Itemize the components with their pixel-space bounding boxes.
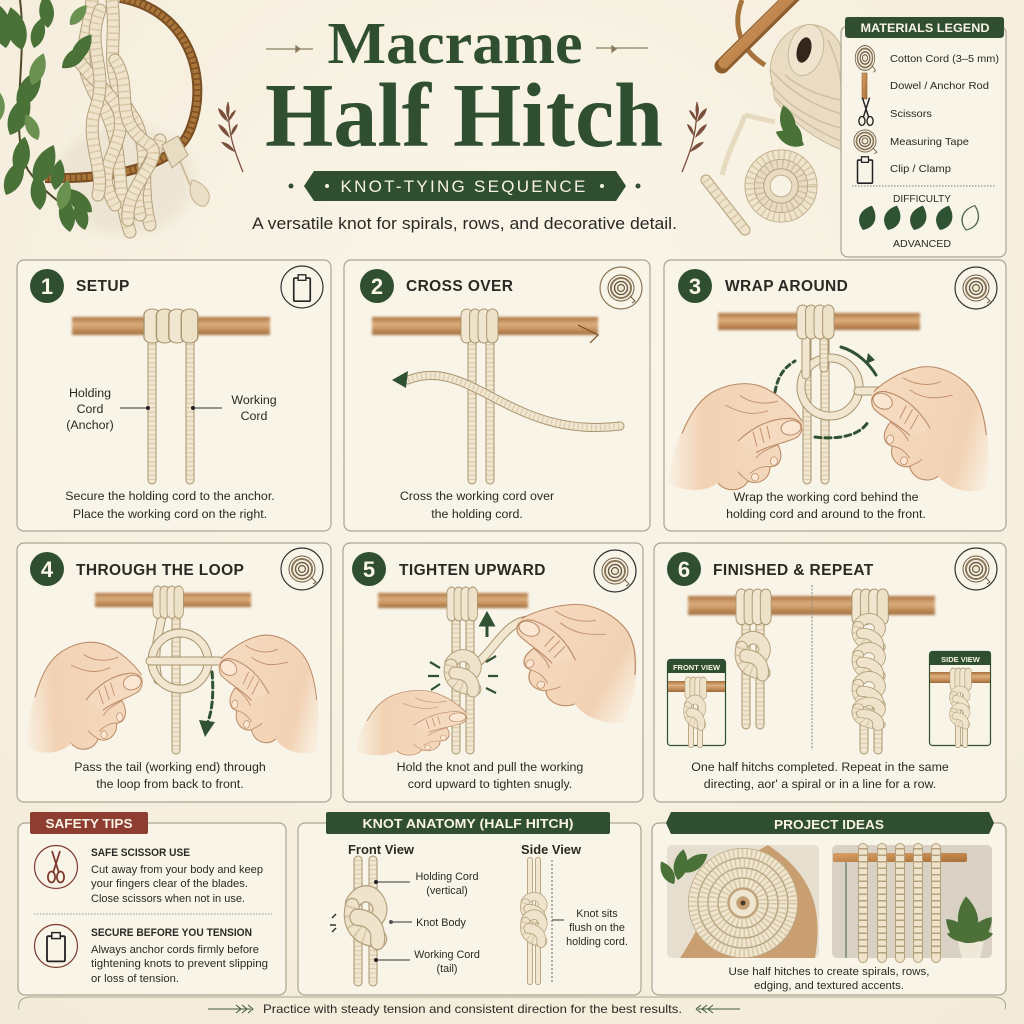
- label: working cord: [374, 949, 480, 975]
- legend label: scissors: Scissors: [890, 109, 932, 120]
- step number 1: 1: [41, 274, 53, 299]
- difficulty rating: ADVANCED: [893, 239, 951, 250]
- caption: the loop from back to front.: [96, 777, 244, 791]
- left hand: [668, 384, 803, 490]
- difficulty rating: [852, 186, 996, 250]
- legend: cotton cord: Cotton Cord (3–5 mm): [890, 54, 999, 65]
- caption: Place the working cord on the right.: [73, 507, 267, 521]
- anatomy heading: [326, 812, 610, 834]
- legend: cotton cord: [855, 46, 999, 72]
- icon: cord coil: [281, 548, 323, 590]
- label: working cord: [191, 393, 277, 423]
- step number 4: 4: [41, 557, 54, 582]
- step number 5: 5: [363, 557, 375, 582]
- icon: cord coil: [594, 550, 636, 592]
- project heading: [666, 812, 994, 834]
- decorative photo: macrame hoop and leaves: [0, 0, 209, 235]
- legend: scissors: [859, 98, 873, 126]
- label: holding cord: Cord: [77, 402, 104, 416]
- diagram: tail through loop with hands: [18, 586, 340, 758]
- icon: scissors: [34, 846, 78, 888]
- icon: left sprig: [218, 102, 243, 172]
- caption: [397, 760, 583, 791]
- anatomy heading: KNOT ANATOMY (HALF HITCH): [362, 816, 574, 831]
- panel: step 1 setup: [17, 260, 331, 531]
- caption: Use half hitches to create spirals, rows,: [728, 966, 930, 978]
- legend: measuring tape: Measuring Tape: [890, 137, 969, 148]
- panel: step 3 wrap around: [664, 260, 1014, 531]
- panel: knot anatomy: [298, 812, 641, 995]
- caption: [65, 489, 275, 521]
- step heading: WRAP AROUND: [725, 278, 848, 295]
- label: working cord: (tail): [436, 963, 458, 975]
- diagram: tightening knot with hands: [355, 586, 673, 755]
- legend header: MATERIALS LEGEND: [860, 21, 990, 35]
- caption: [74, 760, 266, 791]
- panel: project ideas: [652, 812, 1006, 995]
- panel: step 4 through the loop: [17, 543, 340, 802]
- legend header: [845, 17, 1004, 38]
- tip: secure before you tension: [91, 927, 268, 985]
- photo: macrame wall hanging: [832, 845, 997, 958]
- diagram: front knot: [330, 860, 380, 982]
- tip: safe scissor use: [91, 847, 263, 905]
- legend: clip: [858, 157, 951, 183]
- label: holding cord: (Anchor): [66, 418, 114, 432]
- photo: spiral coaster: [656, 845, 819, 958]
- panel: materials legend: [841, 17, 1006, 257]
- tip: safe scissor use: your fingers clear of the blades.: [91, 878, 248, 890]
- caption: One half hitchs completed. Repeat in the same: [691, 760, 949, 774]
- diagram: working cord crossing holding cord: [372, 309, 620, 480]
- label: holding cord: [66, 386, 150, 432]
- icon: clipboard: [34, 924, 78, 968]
- arrow: pull down: [199, 672, 215, 737]
- title flourishes: [266, 46, 648, 52]
- front view heading: Front View: [348, 842, 415, 857]
- diagram: anchor and cords: [72, 309, 270, 480]
- wrap direction arrows: [775, 347, 876, 438]
- footer bracket: [19, 997, 1006, 1009]
- tip: secure before you tension: SECURE BEFORE YOU TENSION: [91, 927, 252, 939]
- title: Half Hitch: Half Hitch: [265, 65, 663, 166]
- caption: [400, 489, 554, 521]
- icon: cord coil: [955, 548, 997, 590]
- tip: secure before you tension: or loss of tension.: [91, 973, 179, 985]
- step heading: SETUP: [76, 278, 130, 295]
- tip: safe scissor use: Cut away from your body and keep: [91, 864, 263, 876]
- difficulty rating: DIFFICULTY: [893, 194, 951, 205]
- icon: cord coil: [955, 267, 997, 309]
- caption: Cross the working cord over: [400, 489, 554, 503]
- step heading: THROUGH THE LOOP: [76, 562, 244, 579]
- caption: directing, aor' a spiral or in a line for a row.: [704, 777, 936, 791]
- label: knot sits flush: holding cord.: [566, 936, 628, 948]
- caption: [728, 966, 930, 992]
- caption: the holding cord.: [431, 507, 523, 521]
- caption: holding cord and around to the front.: [726, 507, 926, 521]
- arrow head: [392, 371, 408, 388]
- label: knot sits flush: Knot sits: [576, 908, 618, 920]
- tension ticks: [428, 656, 498, 693]
- step number 6: 6: [678, 557, 690, 582]
- inset: side view: [930, 651, 991, 746]
- safety heading: SAFETY TIPS: [46, 816, 133, 831]
- diagram: wrapping loop with hands: [668, 305, 1014, 496]
- inset: side view: SIDE VIEW: [941, 655, 981, 664]
- icon: cord coil: [600, 267, 642, 309]
- step number 5: [352, 552, 386, 586]
- step heading: TIGHTEN UPWARD: [399, 562, 546, 579]
- legend: dowel: [862, 73, 989, 99]
- right hand: [204, 622, 340, 758]
- step heading: CROSS OVER: [406, 278, 513, 295]
- caption: Secure the holding cord to the anchor.: [65, 489, 275, 503]
- tip: secure before you tension: tightening knots to prevent slipping: [91, 958, 268, 970]
- label: working cord: Working Cord: [414, 949, 480, 961]
- label: holding cord: Holding Cord: [415, 871, 479, 883]
- safety heading: [30, 812, 148, 834]
- caption: Pass the tail (working end) through: [74, 760, 266, 774]
- side view heading: Side View: [521, 842, 582, 857]
- label: knot body: Knot Body: [416, 917, 467, 929]
- tip: safe scissor use: Close scissors when not in use.: [91, 893, 245, 905]
- left hand: [18, 638, 148, 755]
- label: knot body: [389, 917, 467, 929]
- step heading: FINISHED & REPEAT: [713, 562, 874, 579]
- caption: Hold the knot and pull the working: [397, 760, 583, 774]
- step number 3: [678, 269, 712, 303]
- icon: clipboard: [281, 266, 323, 308]
- caption: [691, 760, 949, 791]
- step number 3: 3: [689, 274, 701, 299]
- panel: step 5 tighten upward: [343, 543, 673, 802]
- label: holding cord: Holding: [69, 386, 111, 400]
- step number 2: 2: [371, 274, 383, 299]
- legend: measuring tape: [854, 130, 969, 154]
- title: Macrame: Macrame: [328, 10, 582, 76]
- step number 6: [667, 552, 701, 586]
- tip: secure before you tension: Always anchor cords firmly before: [91, 944, 259, 956]
- step number 2: [360, 269, 394, 303]
- caption: Wrap the working cord behind the: [733, 490, 919, 504]
- subtitle: A versatile knot for spirals, rows, and decorative detail.: [252, 214, 677, 233]
- label: knot sits flush: flush on the: [569, 922, 625, 934]
- legend: clip: Clip / Clamp: [890, 164, 951, 175]
- decorative photo: cord roll, dowel and coil: [706, 0, 842, 230]
- panel: step 6 finished and repeat: [654, 543, 1006, 802]
- footer note: Practice with steady tension and consistent direction for the best results.: [263, 1002, 682, 1016]
- step number 1: [30, 269, 64, 303]
- panel: safety tips: [18, 812, 286, 995]
- banner: knot-tying sequence: [288, 171, 640, 201]
- inset: front view: FRONT VIEW: [673, 663, 721, 672]
- icon: right sprig: [682, 102, 707, 172]
- panel: step 2 cross over: [344, 260, 650, 531]
- label: holding cord: [374, 871, 479, 897]
- inset: front view: [668, 659, 726, 746]
- label: holding cord: (vertical): [426, 885, 468, 897]
- label: working cord: Working: [231, 393, 277, 407]
- caption: edging, and textured accents.: [754, 980, 904, 992]
- right hand: [486, 586, 673, 729]
- step number 4: [30, 552, 64, 586]
- project heading: PROJECT IDEAS: [774, 817, 884, 832]
- caption: cord upward to tighten snugly.: [408, 777, 572, 791]
- tip: safe scissor use: SAFE SCISSOR USE: [91, 847, 190, 859]
- diagram: finished knots: [688, 585, 935, 750]
- label: knot sits flush: [566, 908, 628, 948]
- legend: dowel: Dowel / Anchor Rod: [890, 81, 989, 92]
- left hand: [355, 690, 468, 755]
- diagram: side knot: [525, 860, 564, 982]
- banner: knot-tying sequence: KNOT-TYING SEQUENCE: [340, 177, 588, 196]
- label: working cord: Cord: [241, 409, 268, 423]
- arrow: pull upward: [481, 614, 493, 637]
- caption: [726, 490, 926, 521]
- right hand: [854, 353, 1014, 496]
